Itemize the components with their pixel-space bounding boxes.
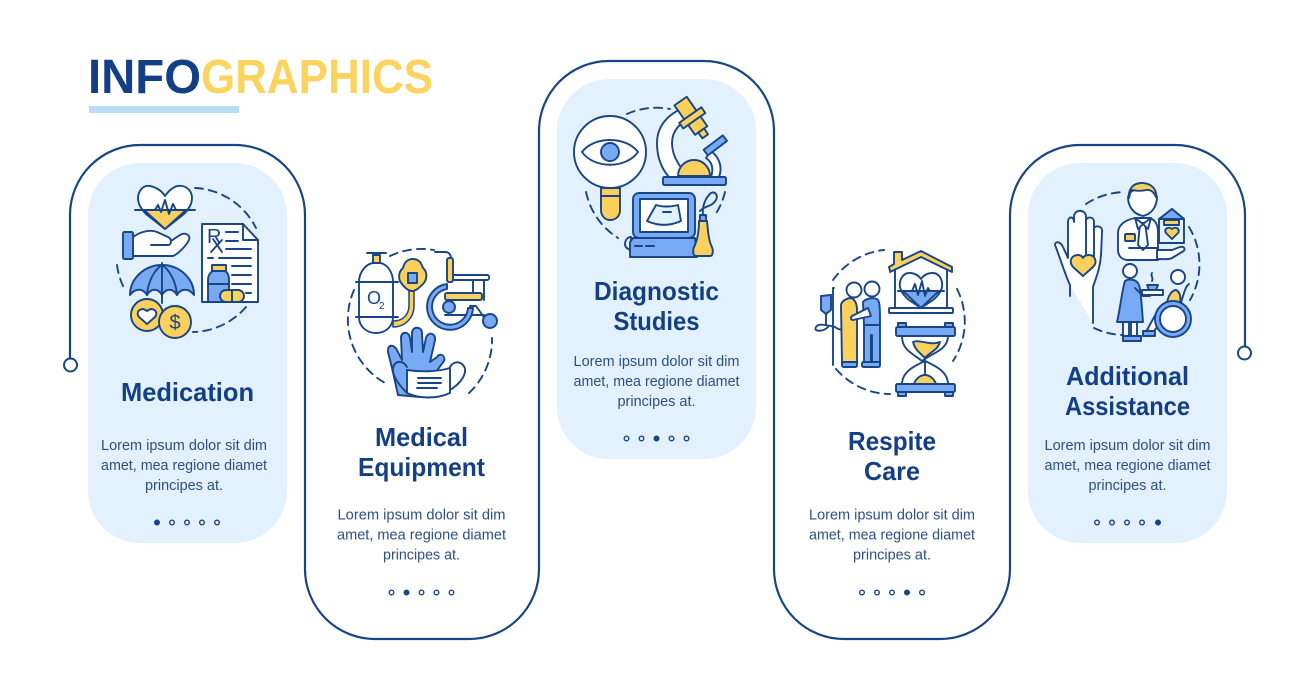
- icon: medication: $: [169, 312, 181, 334]
- icon: diagnostic studies: [574, 93, 727, 257]
- text: diagnostic studies: Lorem ipsum dolor sit dim: [574, 354, 740, 370]
- heading: respite care: [848, 426, 936, 486]
- pagination: respite care: [860, 590, 924, 595]
- heading: diagnostic studies: [594, 276, 719, 336]
- heading: respite care: Respite: [848, 426, 936, 456]
- title: [88, 51, 433, 104]
- title: INFO: [88, 51, 201, 104]
- panel: medication: [88, 163, 287, 543]
- text: medication: principes at.: [145, 478, 223, 494]
- panel: respite care: [809, 250, 975, 595]
- text: additional assistance: amet, mea regione diamet: [1044, 458, 1210, 474]
- heading: diagnostic studies: Diagnostic: [594, 276, 719, 306]
- icon: respite care: [815, 250, 965, 396]
- connecting outline: [70, 61, 1245, 639]
- text: additional assistance: [1044, 438, 1210, 494]
- outline end marker left: [64, 358, 77, 372]
- heading: medical equipment: Medical: [375, 422, 468, 452]
- text: medical equipment: [337, 508, 506, 564]
- heading: additional assistance: Additional: [1066, 361, 1189, 391]
- pagination: diagnostic studies: [624, 436, 689, 441]
- icon: medication: R: [207, 226, 221, 248]
- text: diagnostic studies: [574, 354, 740, 410]
- title underline: [89, 106, 239, 113]
- text: medical equipment: principes at.: [383, 548, 460, 564]
- text: medication: [101, 438, 267, 494]
- text: medication: Lorem ipsum dolor sit dim: [101, 438, 267, 454]
- text: respite care: amet, mea regione diamet: [809, 528, 975, 544]
- icon: medical equipment: [348, 249, 497, 398]
- heading: medical equipment: [358, 422, 485, 482]
- panel: diagnostic studies: [557, 79, 756, 459]
- title: GRAPHICS: [201, 51, 433, 104]
- text: respite care: principes at.: [853, 548, 931, 564]
- text: additional assistance: Lorem ipsum dolor sit dim: [1044, 438, 1210, 454]
- text: medical equipment: Lorem ipsum dolor sit dim: [338, 508, 506, 524]
- icon: additional assistance: [1055, 183, 1199, 341]
- heading: medical equipment: Equipment: [358, 452, 485, 482]
- text: respite care: Lorem ipsum dolor sit dim: [809, 508, 975, 524]
- text: additional assistance: principes at.: [1088, 478, 1166, 494]
- heading: medication: Medication: [121, 377, 254, 407]
- pagination: medication: [155, 520, 219, 525]
- text: diagnostic studies: amet, mea regione diamet: [574, 374, 740, 390]
- pagination: additional assistance: [1095, 520, 1160, 525]
- text: diagnostic studies: principes at.: [618, 394, 696, 410]
- pagination: medical equipment: [389, 590, 454, 595]
- heading: respite care: Care: [864, 456, 920, 486]
- heading: diagnostic studies: Studies: [614, 306, 700, 336]
- icon: medical equipment: O: [367, 288, 381, 308]
- panel: additional assistance: [1028, 163, 1227, 543]
- panel: medical equipment: [337, 249, 506, 595]
- heading: additional assistance: Assistance: [1065, 391, 1190, 421]
- icon: medical equipment: 2: [379, 301, 385, 312]
- outline end marker right: [1238, 346, 1251, 360]
- icon: medication: [117, 186, 258, 338]
- text: medication: amet, mea regione diamet: [101, 458, 267, 474]
- text: medical equipment: amet, mea regione diamet: [337, 528, 506, 544]
- heading: additional assistance: [1065, 361, 1190, 421]
- text: respite care: [809, 508, 975, 564]
